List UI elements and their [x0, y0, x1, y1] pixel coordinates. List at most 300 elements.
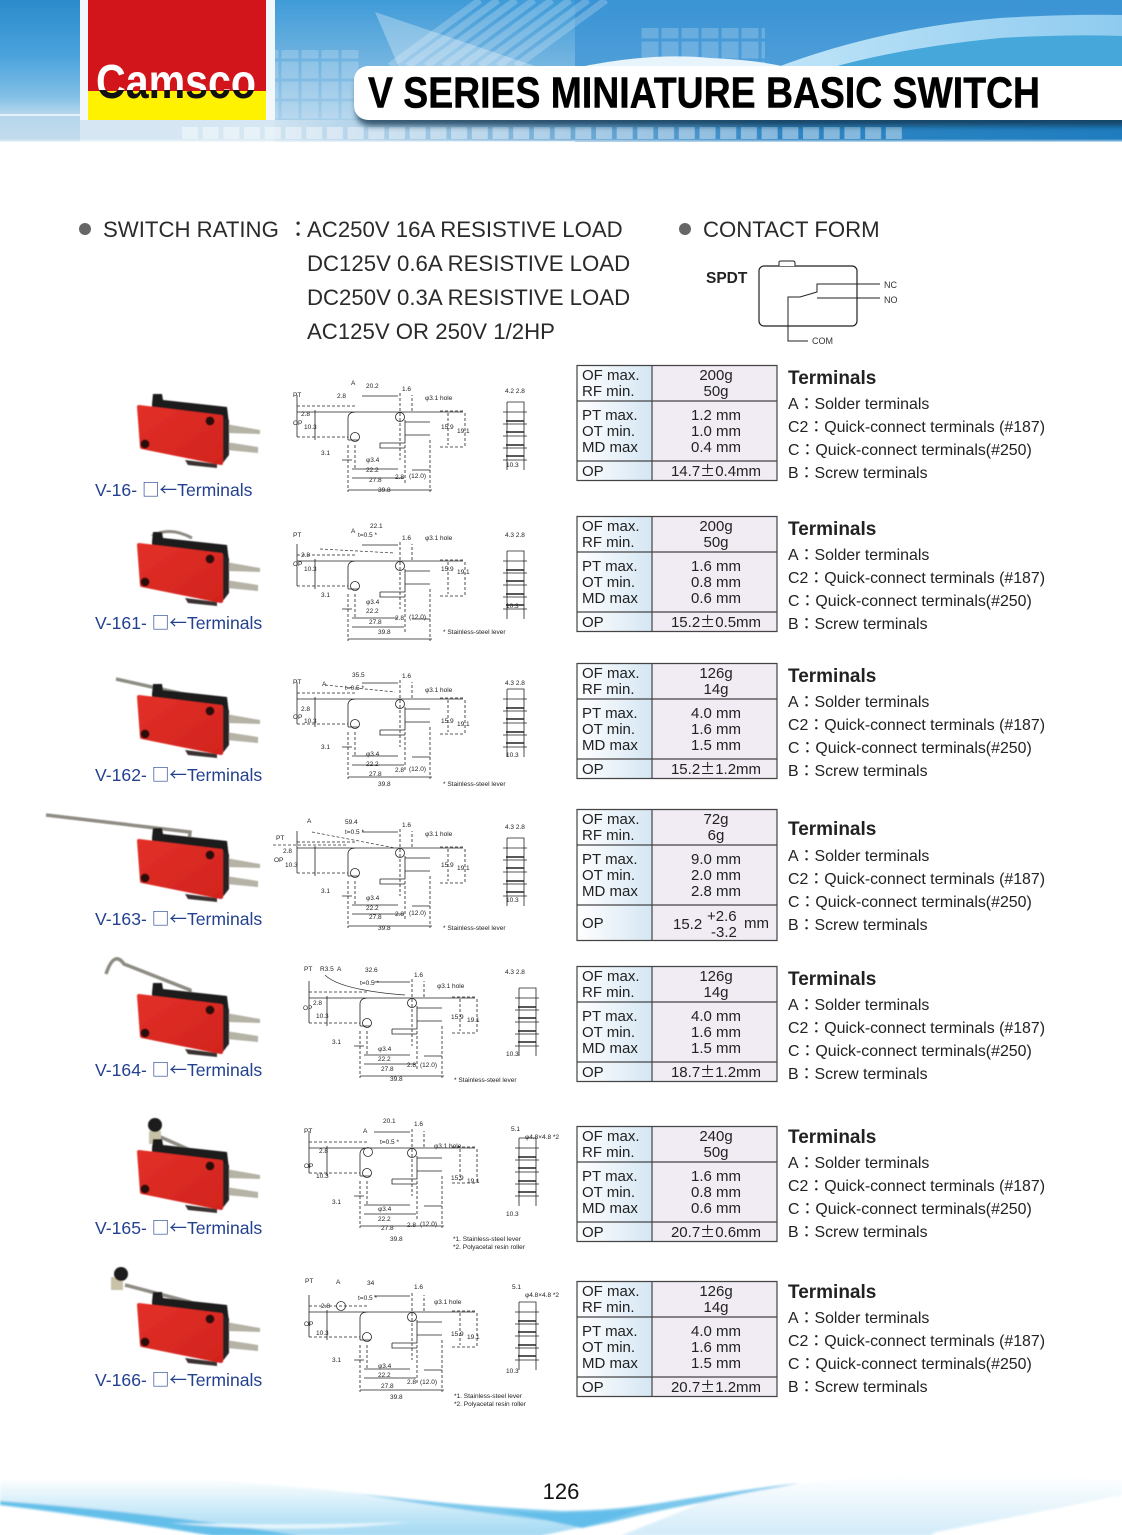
spec table V-165: OT min.	[582, 1184, 635, 1201]
dimension drawing V-165: 1.6	[414, 1121, 423, 1128]
spec table V-166: OP	[582, 1379, 604, 1396]
SPDT contact diagram: COM	[812, 336, 833, 346]
dimension drawing V-16: 10.3	[506, 462, 519, 469]
dimension drawing V-166: 27.8	[381, 1383, 394, 1390]
row: V-16	[95, 365, 1045, 502]
dimension drawing V-165: 2.8	[319, 1148, 328, 1155]
dimension drawing V-165: 22.2	[378, 1216, 391, 1223]
spec table V-162	[577, 663, 777, 779]
dimension drawing V-166	[304, 1278, 559, 1408]
contact form heading: CONTACT FORM	[703, 217, 880, 242]
dimension drawing V-165: 20.1	[383, 1118, 396, 1125]
switch rating block: DC250V 0.3A RESISTIVE LOAD	[307, 285, 630, 310]
spec table V-166: 4.0 mm	[691, 1323, 741, 1340]
dimension drawing V-162: t=0.5 *	[345, 685, 364, 692]
spec table V-163: -3.2	[711, 924, 737, 941]
dimension drawing V-164: 2.8	[407, 1062, 416, 1069]
dimension drawing V-165: φ4.8×4.8 *2	[525, 1134, 559, 1141]
spec table V-162: OP	[582, 761, 604, 778]
terminals list V-163: A：Solder terminals	[788, 848, 929, 865]
dimension drawing V-163: 22.2	[366, 905, 379, 912]
dimension drawing V-162: φ3.4	[366, 751, 380, 758]
spec table V-16: OT min.	[582, 423, 635, 440]
dimension drawing V-16: φ3.4	[366, 457, 380, 464]
SPDT contact diagram	[706, 261, 898, 346]
model label V-163: V-163- □←Terminals	[95, 906, 262, 931]
spec table V-163: MD max	[582, 883, 638, 900]
dimension drawing V-16: 10.3	[304, 424, 317, 431]
product photo V-164	[106, 959, 260, 1057]
spec table V-162: RF min.	[582, 681, 634, 698]
row: V-164	[95, 959, 1045, 1084]
dimension drawing V-162: (12.0)	[409, 766, 426, 773]
dimension drawing V-162: 22.2	[366, 761, 379, 768]
spec table V-162: OF max.	[582, 665, 640, 682]
dimension drawing V-165: 5.1	[511, 1126, 520, 1133]
terminals list V-161	[788, 519, 1045, 633]
terminals list V-165: A：Solder terminals	[788, 1155, 929, 1172]
spec table V-166: RF min.	[582, 1299, 634, 1316]
spec table V-166: OF max.	[582, 1283, 640, 1300]
dimension drawing V-163: 3.1	[321, 888, 330, 895]
dimension drawing V-166: PT	[305, 1278, 313, 1285]
terminals list V-165: B：Screw terminals	[788, 1224, 928, 1241]
spec table V-163: 6g	[708, 827, 724, 844]
spec table V-165: 240g	[699, 1128, 733, 1145]
spec table V-162: 14g	[703, 681, 729, 698]
dimension drawing V-164: 27.8	[381, 1066, 394, 1073]
terminals list V-16: Terminals	[788, 368, 876, 389]
dimension drawing V-162: A	[322, 681, 327, 688]
spec table V-166: 14g	[703, 1299, 729, 1316]
dimension drawing V-161: 4.3 2.8	[505, 532, 525, 539]
dimension drawing V-164: A	[337, 966, 342, 973]
spec table V-161: RF min.	[582, 534, 634, 551]
spec table V-163: RF min.	[582, 827, 634, 844]
dimension drawing V-162: 2.8	[395, 767, 404, 774]
spec table V-163: PT max.	[582, 851, 638, 868]
dimension drawing V-162: 2.8	[301, 706, 310, 713]
terminals list V-164: B：Screw terminals	[788, 1066, 928, 1083]
spec table V-162: OT min.	[582, 721, 635, 738]
dimension drawing V-16: 2.8	[301, 411, 310, 418]
dimension drawing V-166: 39.8	[390, 1394, 403, 1401]
spec table V-165: MD max	[582, 1200, 638, 1217]
spec table V-162: 15.2±1.2mm	[671, 758, 761, 779]
dimension drawing V-163: A	[307, 818, 312, 825]
switch rating block: DC125V 0.6A RESISTIVE LOAD	[307, 251, 630, 276]
dimension drawing V-162: PT	[293, 679, 301, 686]
spec table V-161: MD max	[582, 590, 638, 607]
dimension drawing V-161: φ3.4	[366, 599, 380, 606]
dimension drawing V-164: t=0.5 *	[360, 980, 379, 987]
dimension drawing V-165: 3.1	[332, 1199, 341, 1206]
model label V-161: V-161- □←Terminals	[95, 610, 262, 635]
terminals list V-16	[788, 368, 1045, 482]
spec table V-161: 0.8 mm	[691, 574, 741, 591]
spec table V-164: OF max.	[582, 968, 640, 985]
terminals list V-162: B：Screw terminals	[788, 763, 928, 780]
product photo V-166	[111, 1267, 260, 1366]
dimension drawing V-163: PT	[276, 835, 284, 842]
spec table V-16: OF max.	[582, 367, 640, 384]
dimension drawing V-161: 2.8	[395, 615, 404, 622]
SPDT contact diagram: NC	[884, 280, 897, 290]
dimension drawing V-162: φ3.1 hole	[425, 687, 453, 694]
dimension drawing V-164: * Stainless-steel lever	[454, 1077, 517, 1084]
spec table V-16: PT max.	[582, 407, 638, 424]
spec table V-164: 1.5 mm	[691, 1040, 741, 1057]
dimension drawing V-166: 10.3	[316, 1330, 329, 1337]
model label V-166: V-166- □←Terminals	[95, 1367, 262, 1392]
dimension drawing V-162: 1.6	[402, 673, 411, 680]
spec table V-166: 20.7±1.2mm	[671, 1376, 761, 1397]
dimension drawing V-164: 10.3	[316, 1013, 329, 1020]
dimension drawing V-161: (12.0)	[409, 614, 426, 621]
dimension drawing V-162: 10.3	[506, 752, 519, 759]
dimension drawing V-164: PT	[304, 966, 312, 973]
dimension drawing V-164: φ3.4	[378, 1046, 392, 1053]
spec table V-161: 0.6 mm	[691, 590, 741, 607]
dimension drawing V-166: 10.3	[506, 1368, 519, 1375]
spec table V-163: mm	[744, 915, 769, 932]
dimension drawing V-164: OP	[303, 1005, 312, 1012]
terminals list V-163	[788, 819, 1045, 934]
spec table V-16: 50g	[703, 383, 729, 400]
spec table V-165: 1.6 mm	[691, 1168, 741, 1185]
dimension drawing V-161: 22.1	[370, 523, 383, 530]
dimension drawing V-161: 2.8	[301, 552, 310, 559]
dimension drawing V-164: (12.0)	[420, 1062, 437, 1069]
logo: Camsco	[96, 56, 256, 109]
dimension drawing V-163: 10.3	[285, 862, 298, 869]
spec table V-162: PT max.	[582, 705, 638, 722]
spec table V-161: OT min.	[582, 574, 635, 591]
row: V-163	[46, 809, 1045, 941]
model label V-165: V-165- □←Terminals	[95, 1215, 262, 1240]
dimension drawing V-161: OP	[293, 561, 302, 568]
spec table V-165: 20.7±0.6mm	[671, 1221, 761, 1242]
dimension drawing V-16: 3.1	[321, 450, 330, 457]
spec table V-16: OP	[582, 463, 604, 480]
switch rating block: AC125V OR 250V 1/2HP	[307, 319, 555, 344]
dimension drawing V-162: 35.5	[352, 672, 365, 679]
dimension drawing V-164: 3.1	[332, 1039, 341, 1046]
logo: Camsco	[96, 56, 256, 109]
spec table V-161: OP	[582, 614, 604, 631]
dimension drawing V-166: 34	[367, 1280, 375, 1287]
dimension drawing V-165: OP	[304, 1163, 313, 1170]
dimension drawing V-166: 2.8	[321, 1303, 330, 1310]
spec table V-161: 1.6 mm	[691, 558, 741, 575]
dimension drawing V-165: (12.0)	[420, 1221, 437, 1228]
model label V-162: V-162- □←Terminals	[95, 762, 262, 787]
dimension drawing V-166: 19.1	[467, 1334, 480, 1341]
dimension drawing V-162: 15.9	[441, 718, 454, 725]
terminals list V-161: C2：Quick-connect terminals (#187)	[788, 570, 1045, 587]
spec table V-162: 1.5 mm	[691, 737, 741, 754]
dimension drawing V-16: (12.0)	[409, 473, 426, 480]
dimension drawing V-166: t=0.5 *	[358, 1295, 377, 1302]
dimension drawing V-164: 22.2	[378, 1056, 391, 1063]
dimension drawing V-163: (12.0)	[409, 910, 426, 917]
spec table V-164: 126g	[699, 968, 733, 985]
dimension drawing V-163: 39.8	[378, 925, 391, 932]
terminals list V-165: C2：Quick-connect terminals (#187)	[788, 1178, 1045, 1195]
terminals list V-161: A：Solder terminals	[788, 547, 929, 564]
spec table V-163: OF max.	[582, 811, 640, 828]
dimension drawing V-16: A	[351, 380, 356, 387]
dimension drawing V-165: 39.8	[390, 1236, 403, 1243]
dimension drawing V-16: 4.2 2.8	[505, 388, 525, 395]
dimension drawing V-164: R3.5	[320, 966, 334, 973]
product photo V-163	[46, 815, 260, 902]
spec table V-161	[577, 516, 777, 632]
terminals list V-163: B：Screw terminals	[788, 917, 928, 934]
dimension drawing V-166: 5.1	[512, 1284, 521, 1291]
dimension drawing V-162: 4.3 2.8	[505, 680, 525, 687]
dimension drawing V-164	[303, 966, 539, 1084]
row: V-165	[95, 1118, 1045, 1251]
terminals list V-165	[788, 1127, 1045, 1241]
spec table V-164: 4.0 mm	[691, 1008, 741, 1025]
dimension drawing V-161: φ3.1 hole	[425, 535, 453, 542]
spec table V-16: 0.4 mm	[691, 439, 741, 456]
dimension drawing V-16: 2.8	[337, 393, 346, 400]
dimension drawing V-162: 27.8	[369, 771, 382, 778]
terminals list V-166: B：Screw terminals	[788, 1379, 928, 1396]
terminals list V-163: C2：Quick-connect terminals (#187)	[788, 871, 1045, 888]
spec table V-162: 4.0 mm	[691, 705, 741, 722]
dimension drawing V-166: A	[336, 1279, 341, 1286]
spec table V-165: 0.8 mm	[691, 1184, 741, 1201]
terminals list V-162: C：Quick-connect terminals(#250)	[788, 740, 1032, 757]
dimension drawing V-164: 19.1	[467, 1017, 480, 1024]
dimension drawing V-16: 27.8	[369, 477, 382, 484]
spec table V-166: OT min.	[582, 1339, 635, 1356]
spec table V-166	[577, 1281, 777, 1397]
dimension drawing V-164: 2.8	[313, 1000, 322, 1007]
dimension drawing V-16: φ3.1 hole	[425, 395, 453, 402]
spec table V-161: 200g	[699, 518, 733, 535]
spec table V-16: 200g	[699, 367, 733, 384]
page number: 126	[543, 1479, 579, 1504]
SPDT contact diagram: NO	[884, 295, 898, 305]
switch rating block: SWITCH RATING	[103, 217, 279, 242]
spec table V-164: OP	[582, 1064, 604, 1081]
dimension drawing V-161: 10.3	[506, 603, 519, 610]
spec table V-163: OP	[582, 915, 604, 932]
SPDT contact diagram: SPDT	[706, 270, 748, 287]
terminals list V-166: A：Solder terminals	[788, 1310, 929, 1327]
dimension drawing V-16: OP	[293, 420, 302, 427]
dimension drawing V-163: t=0.5 *	[345, 829, 364, 836]
dimension drawing V-16: 39.8	[378, 487, 391, 494]
row: V-162	[95, 663, 1045, 788]
dimension drawing V-166: φ3.4	[378, 1363, 392, 1370]
dimension drawing V-16	[293, 380, 527, 494]
terminals list V-164: C：Quick-connect terminals(#250)	[788, 1043, 1032, 1060]
dimension drawing V-165: φ3.4	[378, 1206, 392, 1213]
row: V-166	[95, 1267, 1045, 1408]
dimension drawing V-162: 3.1	[321, 744, 330, 751]
spec table V-16: MD max	[582, 439, 638, 456]
terminals list V-161: Terminals	[788, 519, 876, 540]
dimension drawing V-162: 39.8	[378, 781, 391, 788]
dimension drawing V-163: 10.3	[506, 897, 519, 904]
spec table V-16	[577, 365, 777, 481]
dimension drawing V-162: OP	[293, 714, 302, 721]
product photo V-165	[139, 1118, 260, 1213]
spec table V-16: 1.2 mm	[691, 407, 741, 424]
terminals list V-161: B：Screw terminals	[788, 616, 928, 633]
dimension drawing V-16: 22.2	[366, 467, 379, 474]
spec table V-164: OT min.	[582, 1024, 635, 1041]
dimension drawing V-162	[293, 672, 527, 788]
dimension drawing V-163: 19.1	[457, 865, 470, 872]
model label V-164: V-164- □←Terminals	[95, 1057, 262, 1082]
dimension drawing V-162: * Stainless-steel lever	[443, 781, 506, 788]
dimension drawing V-165: *2. Polyacetal resin roller	[453, 1244, 526, 1251]
spec table V-164: MD max	[582, 1040, 638, 1057]
terminals list V-164: A：Solder terminals	[788, 997, 929, 1014]
dimension drawing V-163: 1.6	[402, 822, 411, 829]
dimension drawing V-161: A	[351, 528, 356, 535]
dimension drawing V-161: 15.9	[441, 566, 454, 573]
dimension drawing V-161: PT	[293, 532, 301, 539]
dimension drawing V-165: 10.3	[316, 1173, 329, 1180]
dimension drawing V-163	[273, 818, 527, 932]
dimension drawing V-161: 3.1	[321, 592, 330, 599]
dimension drawing V-16: 1.6	[402, 386, 411, 393]
dimension drawing V-166: φ4.8×4.8 *2	[525, 1292, 559, 1299]
dimension drawing V-16: 20.2	[366, 383, 379, 390]
terminals list V-16: C2：Quick-connect terminals (#187)	[788, 419, 1045, 436]
dimension drawing V-166: φ3.1 hole	[434, 1299, 462, 1306]
dimension drawing V-164: 15.9	[451, 1014, 464, 1021]
dimension drawing V-166: 3.1	[332, 1357, 341, 1364]
dimension drawing V-162: 19.1	[457, 721, 470, 728]
spec table V-163: 9.0 mm	[691, 851, 741, 868]
spec table V-165	[577, 1126, 777, 1242]
dimension drawing V-166: 22.2	[378, 1372, 391, 1379]
dimension drawing V-161: 1.6	[402, 535, 411, 542]
spec table V-162: 1.6 mm	[691, 721, 741, 738]
terminals list V-162: C2：Quick-connect terminals (#187)	[788, 717, 1045, 734]
spec table V-161: 15.2±0.5mm	[671, 611, 761, 632]
spec table V-16: 1.0 mm	[691, 423, 741, 440]
switch rating block: AC250V 16A RESISTIVE LOAD	[307, 217, 623, 242]
dimension drawing V-164: 39.8	[390, 1076, 403, 1083]
spec table V-161: PT max.	[582, 558, 638, 575]
dimension drawing V-16: PT	[293, 392, 301, 399]
spec table V-164: 1.6 mm	[691, 1024, 741, 1041]
dimension drawing V-163: 59.4	[345, 819, 358, 826]
dimension drawing V-166: 2.8	[407, 1379, 416, 1386]
dimension drawing V-165: A	[363, 1128, 368, 1135]
terminals list V-166: C2：Quick-connect terminals (#187)	[788, 1333, 1045, 1350]
dimension drawing V-166: *1. Stainless-steel lever	[454, 1393, 523, 1400]
spec table V-165: PT max.	[582, 1168, 638, 1185]
spec table V-163: 72g	[703, 811, 729, 828]
dimension drawing V-164: φ3.1 hole	[437, 983, 465, 990]
dimension drawing V-165	[304, 1118, 559, 1251]
dimension drawing V-163: 15.9	[441, 862, 454, 869]
dimension drawing V-161: 39.8	[378, 629, 391, 636]
dimension drawing V-161: 10.3	[304, 566, 317, 573]
dimension drawing V-164: 1.6	[414, 972, 423, 979]
terminals list V-165: Terminals	[788, 1127, 876, 1148]
dimension drawing V-163: 2.8	[395, 911, 404, 918]
terminals list V-164	[788, 969, 1045, 1083]
spec table V-166: 126g	[699, 1283, 733, 1300]
terminals list V-161: C：Quick-connect terminals(#250)	[788, 593, 1032, 610]
spec table V-165: 0.6 mm	[691, 1200, 741, 1217]
spec table V-163: 2.0 mm	[691, 867, 741, 884]
dimension drawing V-161: 19.1	[457, 569, 470, 576]
row: V-161	[95, 516, 1045, 641]
dimension drawing V-161: 22.2	[366, 608, 379, 615]
dimension drawing V-162: 10.3	[304, 718, 317, 725]
dimension drawing V-165: 27.8	[381, 1225, 394, 1232]
dimension drawing V-164: 32.6	[365, 967, 378, 974]
dimension drawing V-164: 4.3 2.8	[505, 969, 525, 976]
dimension drawing V-163: φ3.4	[366, 895, 380, 902]
dimension drawing V-163: φ3.1 hole	[425, 831, 453, 838]
dimension drawing V-166: 1.6	[414, 1284, 423, 1291]
dimension drawing V-165: 19.1	[467, 1178, 480, 1185]
spec table V-163: OT min.	[582, 867, 635, 884]
spec table V-164: RF min.	[582, 984, 634, 1001]
logo	[80, 0, 275, 120]
dimension drawing V-164: 10.3	[506, 1051, 519, 1058]
dimension drawing V-16: 2.8	[395, 474, 404, 481]
dimension drawing V-166: (12.0)	[420, 1379, 437, 1386]
dimension drawing V-163: OP	[274, 857, 283, 864]
terminals list V-16: B：Screw terminals	[788, 465, 928, 482]
spec table V-162: 126g	[699, 665, 733, 682]
dimension drawing V-163: * Stainless-steel lever	[443, 925, 506, 932]
dimension drawing V-165: *1. Stainless-steel lever	[453, 1236, 522, 1243]
dimension drawing V-166: OP	[304, 1321, 313, 1328]
switch rating block: ：	[287, 212, 309, 244]
dimension drawing V-166: *2. Polyacetal resin roller	[454, 1401, 527, 1408]
dimension drawing V-165: t=0.5 *	[380, 1139, 399, 1146]
dimension drawing V-165: PT	[304, 1128, 312, 1135]
spec table V-166: 1.5 mm	[691, 1355, 741, 1372]
product photo V-162	[116, 679, 260, 758]
spec table V-166: PT max.	[582, 1323, 638, 1340]
terminals list V-16: A：Solder terminals	[788, 396, 929, 413]
spec table V-163: 15.2	[673, 916, 702, 933]
dimension drawing V-16: 15.9	[441, 424, 454, 431]
terminals list V-164: C2：Quick-connect terminals (#187)	[788, 1020, 1045, 1037]
spec table V-163: 2.8 mm	[691, 883, 741, 900]
spec table V-165: OF max.	[582, 1128, 640, 1145]
footer wave	[0, 1473, 1122, 1535]
dimension drawing V-161	[293, 523, 527, 641]
terminals list V-16: C：Quick-connect terminals(#250)	[788, 442, 1032, 459]
model label V-16: V-16- □←Terminals	[95, 477, 253, 502]
product photo V-16	[139, 394, 260, 468]
terminals list V-163: C：Quick-connect terminals(#250)	[788, 894, 1032, 911]
spec table V-161: OF max.	[582, 518, 640, 535]
spec table V-162: MD max	[582, 737, 638, 754]
terminals list V-162: A：Solder terminals	[788, 694, 929, 711]
terminals list V-162: Terminals	[788, 666, 876, 687]
spec table V-165: 50g	[703, 1144, 729, 1161]
spec table V-164: 14g	[703, 984, 729, 1001]
